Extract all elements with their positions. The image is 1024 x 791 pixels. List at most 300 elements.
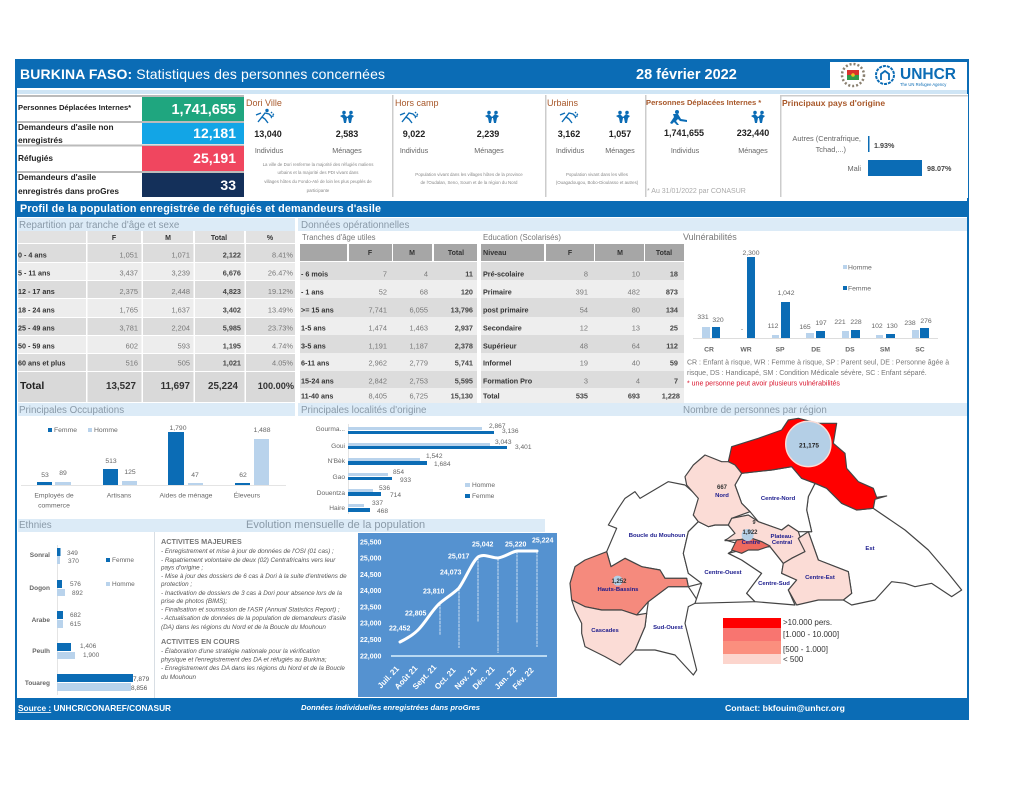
title banner <box>16 60 968 90</box>
title banner: 28 février 2022 <box>636 67 737 83</box>
table: education: 7 <box>674 376 678 386</box>
table: tranches d'âge utiles: 15-24 ans <box>301 376 334 386</box>
panel: Urbains: Individus <box>556 146 585 155</box>
icon: family group Urbains <box>616 111 630 123</box>
table: age and sex: Total <box>20 380 44 392</box>
table: age and sex: 1,195 <box>223 342 241 350</box>
map legend: [500 - 1.000] <box>783 645 828 654</box>
sub-heading bands: Principales localités d'origine <box>301 405 427 416</box>
table: education: 13 <box>632 324 640 332</box>
chart: vulnérabilités: 238 <box>904 320 916 327</box>
table: education: Formation Pro <box>483 376 533 386</box>
chart: vulnérabilités: 320 <box>712 317 724 324</box>
chart: vulnérabilités: 2,300 <box>742 250 760 257</box>
table: tranches d'âge utiles: 1-5 ans <box>301 324 326 332</box>
table: education: 134 <box>666 306 679 314</box>
table: age and sex: 26.47% <box>268 268 293 278</box>
table: tranches d'âge utiles: 6,725 <box>410 392 428 400</box>
chart: localités d'origine: 337 <box>372 500 383 507</box>
table: age and sex: 12 - 17 ans <box>18 287 55 296</box>
chart: évolution mensuelle: Déc. 21 <box>471 664 497 691</box>
table: tranches d'âge utiles: 1,474 <box>368 324 387 332</box>
table: tranches d'âge utiles: F <box>368 250 373 257</box>
panel: Principaux pays d'origine: 98.07% <box>927 164 952 173</box>
panel: Urbains <box>545 95 639 197</box>
bubble: Sahel <box>786 421 831 467</box>
chart: vulnérabilités: Femme <box>848 286 871 292</box>
panel: Personnes Déplacées Internes: 232,440 <box>737 128 769 138</box>
chart: principales occupations: Homme <box>94 427 118 434</box>
divider lines <box>154 532 155 698</box>
chart: localités d'origine: 1,684 <box>434 461 451 468</box>
text block: activités: - Élaboration d'une stratégie nationale pour la vérification <box>161 646 320 655</box>
chart: ethnies: 576 <box>70 581 81 588</box>
chart: localités d'origine: 536 <box>379 485 390 492</box>
table: education: Supérieur <box>483 342 517 350</box>
chart: vulnérabilités: DE <box>811 346 821 354</box>
table: tranches d'âge utiles: 52 <box>379 288 387 296</box>
region: Sud-Ouest <box>635 587 698 675</box>
page frame <box>16 60 968 719</box>
chart: évolution mensuelle: Juil. 21 <box>376 664 401 690</box>
panel: Urbains: Urbains <box>547 98 579 108</box>
logo: Burkina emblem and UNHCR: UNHCR <box>900 66 956 83</box>
chart: vulnérabilités: 221 <box>834 319 846 326</box>
table: tranches d'âge utiles: - 6 mois <box>301 270 328 278</box>
table: age and sex: 2,204 <box>172 324 190 332</box>
panel: Dori Ville: participante <box>307 188 330 193</box>
table: education: 12 <box>580 324 588 332</box>
region: Sahel <box>728 418 887 510</box>
chart: principales occupations: 47 <box>191 472 199 479</box>
panel: Personnes Déplacées Internes: Ménages <box>738 146 768 155</box>
panel: key figures: 1,741,655 <box>171 102 236 118</box>
table: tranches d'âge utiles: 2,378 <box>455 342 473 350</box>
logo: Burkina emblem and UNHCR: The UN Refugee Agency <box>900 82 947 87</box>
chart: évolution mensuelle: 24,000 <box>360 588 382 595</box>
chart: ethnies <box>25 545 150 695</box>
table: tranches d'âge utiles: 8,405 <box>368 392 387 400</box>
table: tranches d'âge utiles: M <box>409 250 415 257</box>
table: education: Secondaire <box>483 324 522 332</box>
sub-heading bands: Nombre de personnes par région <box>683 405 827 416</box>
panel: Urbains: Population vivant dans les villes <box>566 172 629 177</box>
text block: activités: du Mouhoun <box>161 674 197 681</box>
region: Nord <box>685 455 750 527</box>
panel: Dori Ville <box>246 98 374 193</box>
footer: Source : UNHCR/CONAREF/CONASUR <box>18 703 171 713</box>
table: age and sex: 19.12% <box>268 287 293 296</box>
region: Est <box>807 483 962 605</box>
chart: évolution mensuelle: 25,000 <box>360 556 382 562</box>
chart: évolution mensuelle: 25,042 <box>472 542 494 548</box>
map labels: Centre <box>742 540 761 546</box>
table: age and sex: F <box>112 235 117 242</box>
table: age and sex: 3,402 <box>223 306 241 314</box>
table: tranches d'âge utiles: 5,741 <box>455 358 473 368</box>
table: age and sex: 1,051 <box>120 250 138 260</box>
map legend: [1.000 - 10.000] <box>783 630 839 639</box>
table: education: 1,228 <box>662 392 680 400</box>
map labels: Centre-Nord <box>761 496 796 502</box>
panel: key figures: enregistrés dans proGres <box>18 186 119 196</box>
panel: key figures: 25,191 <box>193 150 236 166</box>
chart: ethnies: 349 <box>67 550 78 557</box>
table: age and sex: 2,375 <box>120 287 138 296</box>
chart: évolution mensuelle: Fév. 22 <box>511 665 536 691</box>
chart: principales occupations: Aides de ménage <box>160 492 213 500</box>
chart: ethnies: 8,856 <box>131 685 148 692</box>
panel: Dori Ville: urbains et la majorité des PDI vivant dans <box>277 170 359 175</box>
icon: running person <box>256 110 274 123</box>
chart: principales occupations: 125 <box>124 469 136 476</box>
region: Boucle du Mouhoun <box>607 482 702 587</box>
text block: activités: ACTIVITES EN COURS <box>161 637 240 646</box>
map labels: 1,252 <box>611 579 627 585</box>
table: education: Niveau <box>483 248 507 257</box>
chart: localités d'origine: N'Bèk <box>328 458 346 465</box>
table: education: M <box>617 250 623 257</box>
chart: principales occupations: Femme <box>54 427 77 434</box>
table: education: Education (Scolarisés) <box>483 233 561 242</box>
panel: Personnes Déplacées Internes <box>645 95 769 197</box>
chart: localités d'origine: 468 <box>377 508 388 515</box>
table: education: post primaire <box>483 306 529 314</box>
panel: key figures: Demandeurs d'asile non <box>18 122 114 132</box>
chart: localités d'origine: 854 <box>393 469 404 476</box>
panel: Principaux pays d'origine: Autres (Centrafrique, <box>792 134 861 143</box>
chart: vulnérabilités: 197 <box>815 320 827 327</box>
chart: principales occupations: commerce <box>38 502 70 510</box>
panel: key figures: enregistrés <box>18 135 63 145</box>
table: age and sex: 5,985 <box>223 324 241 332</box>
chart: ethnies: Homme <box>112 581 135 588</box>
table: age and sex: M <box>165 235 171 242</box>
table: age and sex: 1,637 <box>172 306 190 314</box>
panel: Dori Ville: 2,583 <box>336 129 358 139</box>
map labels: Hauts-Bassins <box>598 587 639 593</box>
sub-heading bands: Evolution mensuelle de la population <box>246 519 425 531</box>
icon: family group Dori <box>340 111 354 123</box>
chart: ethnies: Peulh <box>32 648 50 655</box>
chart: évolution mensuelle: 22,805 <box>405 610 427 618</box>
panel: Personnes Déplacées Internes: Individus <box>671 146 700 155</box>
panel: Principaux pays d'origine: Mali <box>847 164 861 173</box>
map labels: Central <box>772 540 793 546</box>
panel: Hors camp: Individus <box>400 146 429 155</box>
section heading: profil <box>17 201 968 217</box>
panel: Dori Ville: 13,040 <box>254 129 282 139</box>
panel: Dori Ville: Individus <box>255 146 284 155</box>
table: education: Primaire <box>483 288 512 296</box>
table: tranches d'âge utiles: 4 <box>424 270 428 278</box>
panel: Urbains: (Ouagadougou, Bobo-Dioulasso et autres) <box>556 180 639 185</box>
chart: vulnérabilités: SC <box>915 346 925 354</box>
panel: Hors camp <box>392 95 523 197</box>
chart: ethnies: Touareg <box>25 680 50 687</box>
chart: évolution mensuelle: Oct. 21 <box>433 665 458 691</box>
chart: évolution mensuelle: 24,073 <box>440 570 462 576</box>
table: age and sex: 13.49% <box>268 306 293 314</box>
chart: évolution mensuelle: 23,000 <box>360 620 382 628</box>
sub-heading bands <box>18 218 967 532</box>
chart: ethnies: Femme <box>112 557 134 564</box>
chart: vulnérabilités: 228 <box>850 319 862 326</box>
table: education <box>481 233 684 403</box>
chart: ethnies: Arabe <box>32 617 50 624</box>
table: age and sex: 1,765 <box>120 306 138 314</box>
table: age and sex: Total <box>211 235 227 242</box>
chart: ethnies: 370 <box>68 558 79 565</box>
chart: principales occupations <box>21 425 286 510</box>
chart: ethnies: 615 <box>70 621 81 628</box>
table: education: 48 <box>580 342 588 350</box>
chart: localités d'origine: 3,401 <box>515 444 532 451</box>
chart: principales occupations: 513 <box>105 458 117 465</box>
table: education: 482 <box>628 288 640 296</box>
chart: principales occupations: Artisans <box>107 492 132 500</box>
table: tranches d'âge utiles: 7 <box>383 270 387 278</box>
table: tranches d'âge utiles: 1,191 <box>368 342 387 350</box>
table: age and sex: 1,021 <box>223 358 241 368</box>
table: education: Informel <box>483 358 511 368</box>
table: tranches d'âge utiles <box>300 233 477 403</box>
chart: localités d'origine: 2,867 <box>489 423 506 430</box>
chart: ethnies: Sonraï <box>30 552 50 559</box>
table: age and sex: 602 <box>126 342 138 350</box>
text block: activités: (DA) dans les régions du Nord et de la Boucle du Mouhoun <box>161 624 326 631</box>
table: age and sex: 0 - 4 ans <box>18 250 47 260</box>
panel: Principaux pays d'origine <box>780 95 968 197</box>
map labels: Boucle du Mouhoun <box>629 533 686 539</box>
chart: principales occupations: 53 <box>41 472 49 479</box>
map legend <box>723 618 839 664</box>
chart: localités d'origine: Douentza <box>317 490 345 497</box>
panel: Personnes Déplacées Internes: * Au 31/01/2022 par CONASUR <box>647 188 746 195</box>
chart: principales occupations: Éleveurs <box>234 490 261 500</box>
map labels: Cascades <box>591 628 619 634</box>
table: age and sex: 6,676 <box>223 268 241 278</box>
table: education: Pré-scolaire <box>483 270 524 278</box>
chart: vulnérabilités: 1,042 <box>777 290 795 297</box>
chart: localités d'origine: 3,136 <box>502 428 519 435</box>
chart: vulnérabilités: CR : Enfant à risque, WR : Femme à risque, SP : Parent seul, DE : Personne âgée à <box>687 360 949 366</box>
table: tranches d'âge utiles: 15,130 <box>451 392 473 400</box>
table: tranches d'âge utiles: 1,463 <box>410 324 428 332</box>
map labels <box>591 442 875 634</box>
chart: évolution mensuelle: 22,452 <box>389 626 411 632</box>
table: tranches d'âge utiles: 7,741 <box>368 306 387 314</box>
table: age and sex: 60 ans et plus <box>18 358 66 368</box>
table: age and sex: 23.73% <box>268 324 293 332</box>
text block: activités: pays d'origine ; <box>160 564 203 572</box>
table: education: 25 <box>670 324 678 332</box>
table: education: 873 <box>666 288 678 296</box>
chart: évolution mensuelle <box>358 533 557 697</box>
table: age and sex: 2,448 <box>172 287 190 296</box>
table: tranches d'âge utiles: 2,937 <box>455 324 473 332</box>
table: education: 3 <box>584 376 588 386</box>
region: Hauts-Bassins <box>570 552 688 615</box>
table: tranches d'âge utiles: 11-40 ans <box>301 392 333 400</box>
logo: Burkina emblem and UNHCR <box>830 62 967 88</box>
chart: vulnérabilités: risque, DS : Handicapé, SM : Condition Médicale sévère, SC : Enfant séparé. <box>687 370 927 377</box>
table: education: Total <box>656 250 672 257</box>
panel: Urbains: Ménages <box>605 146 635 155</box>
text block: activités: - Enregistrement et mise à jour de données de l'OSI (01 cas) ; <box>161 548 334 555</box>
map labels: Centre-Est <box>805 575 835 581</box>
text block: activités: - Actualisation de données de la population de demandeurs d'asile <box>161 615 347 622</box>
panel: key figures <box>17 94 968 198</box>
icon: family group PDI <box>751 111 765 123</box>
chart: localités d'origine <box>316 423 532 515</box>
table: age and sex: 100.00% <box>258 381 294 391</box>
panel: Principaux pays d'origine: Tchad,...) <box>816 145 846 154</box>
text block: activités: ACTIVITES MAJEURES <box>161 537 242 546</box>
table: tranches d'âge utiles: - 1 ans <box>301 288 324 296</box>
table: education: 112 <box>666 342 678 350</box>
panel: Hors camp: Population vivant dans les villages hôtes de la province <box>415 172 523 177</box>
chart: localités d'origine: Gao <box>333 474 345 481</box>
panel: Urbains: 1,057 <box>609 129 631 139</box>
chart: principales occupations: 89 <box>59 470 67 477</box>
chart: vulnérabilités: 130 <box>886 323 898 330</box>
table: tranches d'âge utiles: 13,796 <box>451 306 473 314</box>
chart: principales occupations: 62 <box>239 472 247 479</box>
table: tranches d'âge utiles: 120 <box>461 288 473 296</box>
table: tranches d'âge utiles: 2,962 <box>368 358 387 368</box>
table: education: 10 <box>632 270 640 278</box>
table: age and sex: 18 - 24 ans <box>18 306 55 314</box>
table: tranches d'âge utiles: 2,779 <box>410 358 428 368</box>
chart: évolution mensuelle: 23,500 <box>360 604 382 612</box>
panel: key figures: Réfugiés <box>18 153 53 163</box>
table: education: 18 <box>670 270 678 278</box>
table: education: 59 <box>670 358 678 368</box>
panel: Hors camp: 2,239 <box>477 129 499 139</box>
panel: Principaux pays d'origine: Principaux pays d'origine <box>782 98 885 108</box>
table: tranches d'âge utiles: 2,753 <box>410 376 428 386</box>
panel: Dori Ville: Ménages <box>332 146 362 155</box>
table: age and sex: 4,823 <box>223 287 241 296</box>
chart: localités d'origine: Homme <box>472 482 495 489</box>
map labels: Plateau- <box>771 534 793 540</box>
table: age and sex: 5 - 11 ans <box>18 268 50 278</box>
text block: activités <box>160 537 347 681</box>
text block: activités: - Inactivation de dossiers de 3 cas à Dori pour absence lors de la <box>161 590 342 597</box>
chart: vulnérabilités: WR <box>740 346 752 354</box>
chart: vulnérabilités: 165 <box>799 324 811 331</box>
bubble: Hauts-Bassins <box>613 576 623 586</box>
table: tranches d'âge utiles: 6-11 ans <box>301 358 329 368</box>
table: age and sex: 505 <box>178 358 190 368</box>
map labels: Centre-Ouest <box>704 570 742 576</box>
text block: activités: - Finalisation et soumission de l'ASR (Annual Statistics Report) ; <box>161 606 340 614</box>
chart: vulnérabilités: 331 <box>697 314 709 321</box>
map labels: Sud-Ouest <box>653 625 683 631</box>
region: Plateau-Central <box>725 515 805 563</box>
chart: localités d'origine: Femme <box>472 493 495 500</box>
table: age and sex: 3,437 <box>120 268 138 278</box>
panel: key figures: 33 <box>220 177 236 193</box>
map labels: 667 <box>717 485 728 491</box>
region: Centre <box>732 538 770 553</box>
table: age and sex: 13,527 <box>106 381 137 392</box>
map legend: >10.000 pers. <box>783 618 832 627</box>
sub-heading bands: Données opérationnelles <box>301 220 409 231</box>
chart: ethnies: 892 <box>72 590 83 597</box>
panel: Dori Ville: villages hôtes du Fondo-Até de loin les plus peuplés de <box>264 179 372 184</box>
chart: localités d'origine: Goui <box>331 443 346 450</box>
footer: Données individuelles enregistrées dans proGres <box>301 703 480 712</box>
text block: activités: - Rapatriement volontaire de deux (02) Centrafricains vers leur <box>161 557 336 564</box>
chart: évolution mensuelle: 22,000 <box>360 654 382 660</box>
chart: vulnérabilités: CR <box>704 346 714 354</box>
region: Cascades <box>572 600 647 665</box>
chart: vulnérabilités: * une personne peut avoir plusieurs vulnérabilités <box>687 380 840 388</box>
table: age and sex: 3,239 <box>172 268 190 278</box>
panel: Personnes Déplacées Internes: 1,741,655 <box>664 128 704 138</box>
chart: vulnérabilités: SP <box>775 346 785 354</box>
panel: Hors camp: de l'Oudalan, Seno, Soum et de la région du Nord <box>420 180 518 185</box>
chart: évolution mensuelle: Août 21 <box>393 663 420 691</box>
panel: Hors camp: Ménages <box>474 146 504 155</box>
table: tranches d'âge utiles: 68 <box>420 288 428 296</box>
panel: Hors camp: Hors camp <box>395 98 439 108</box>
table: age and sex: 50 - 59 ans <box>18 342 55 350</box>
chart: principales occupations: 1,488 <box>253 427 271 434</box>
map labels: Nord <box>715 493 729 499</box>
region: Centre-Sud <box>728 547 797 605</box>
chart: vulnérabilités: SM <box>880 346 890 354</box>
chart: localités d'origine: 3,043 <box>495 439 512 446</box>
panel: Urbains: 3,162 <box>558 129 580 139</box>
region: Centre-Ouest <box>683 522 762 603</box>
sub-heading bands: Principales Occupations <box>19 405 124 416</box>
table: tranches d'âge utiles: Tranches d'âge utiles <box>302 233 376 242</box>
map: personnes par région <box>570 418 962 675</box>
table: education: 40 <box>632 358 640 368</box>
map legend: < 500 <box>783 655 804 664</box>
map labels: Est <box>865 546 875 552</box>
sub-heading bands: Repartition par tranche d'âge et sexe <box>19 220 180 231</box>
table: age and sex: % <box>267 235 274 242</box>
table: age and sex: 3,781 <box>120 324 138 332</box>
table: tranches d'âge utiles: 2,842 <box>368 376 387 386</box>
chart: vulnérabilités: 276 <box>920 318 932 325</box>
table: tranches d'âge utiles: >= 15 ans <box>301 306 334 314</box>
table: age and sex: 4.05% <box>272 358 293 368</box>
region: Centre-Nord <box>735 467 815 532</box>
text block: activités: - Enregistrement des DA dans les régions du Nord et de la Boucle <box>161 665 345 672</box>
panel: Hors camp: 9,022 <box>403 129 425 139</box>
table: age and sex: 8.41% <box>272 250 293 260</box>
table: education: 80 <box>632 306 640 314</box>
chart: ethnies: Dogon <box>29 585 50 592</box>
table: education: 4 <box>636 376 640 386</box>
panel: key figures: 12,181 <box>193 125 236 141</box>
chart: évolution mensuelle: Sept. 21 <box>411 662 439 691</box>
sub-heading bands: Ethnies <box>19 520 52 531</box>
footer <box>16 698 969 719</box>
table: tranches d'âge utiles: 3-5 ans <box>301 342 326 350</box>
table: tranches d'âge utiles: 1,187 <box>410 342 428 350</box>
table: age and sex: 4.74% <box>272 342 293 350</box>
map labels: Centre-Sud <box>758 581 790 587</box>
panel: Dori Ville: Dori Ville <box>246 98 282 108</box>
chart: évolution mensuelle: 25,224 <box>532 538 554 544</box>
chart: localités d'origine: 933 <box>400 477 411 484</box>
